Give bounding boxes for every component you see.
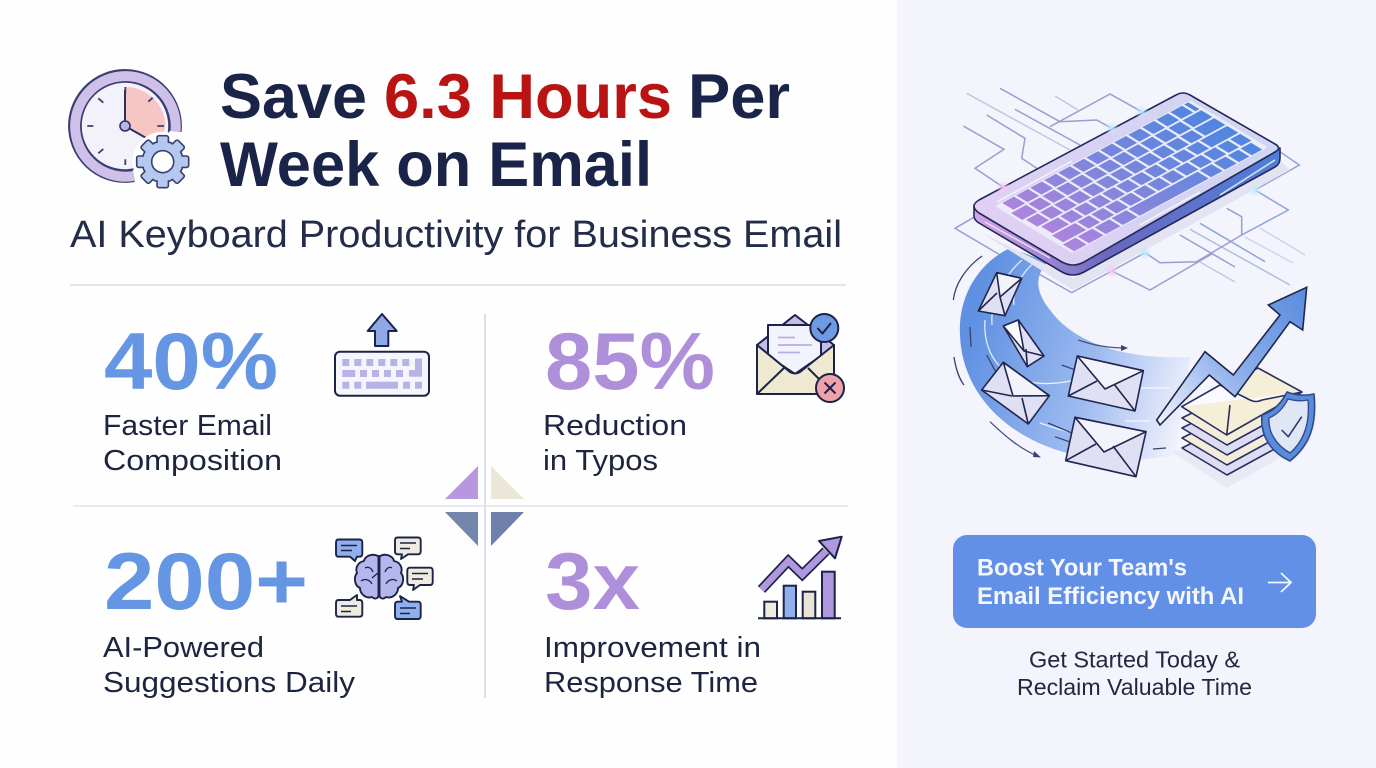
title: Save <box>220 62 367 132</box>
panel: right sidebar background <box>897 0 1376 768</box>
panel: stat 40% faster composition <box>103 314 429 477</box>
title <box>220 62 790 200</box>
panel: stat 200+ suggestions <box>103 537 433 699</box>
envelope 3 <box>982 362 1049 424</box>
envelope 1 <box>978 273 1022 316</box>
button text: Email Efficiency with AI <box>977 583 1244 610</box>
stat label <box>544 632 761 699</box>
panel: stat 3x response time <box>544 537 842 699</box>
illustration: AI keyboard sending emails <box>953 88 1315 488</box>
stat value 40%: 40% <box>104 317 278 407</box>
swoosh ribbon <box>953 248 1190 460</box>
circuit lines behind keyboard <box>955 88 1305 293</box>
stat label: Reduction <box>543 410 687 442</box>
button text <box>977 555 1244 610</box>
stat label <box>103 410 282 477</box>
envelope 2 <box>1003 320 1044 367</box>
growth arrow <box>1157 287 1307 425</box>
circuit nodes <box>996 105 1262 278</box>
stat value 3x: 3x <box>545 537 640 627</box>
subtitle: AI Keyboard Productivity for Business Email <box>70 214 842 256</box>
stat label: Faster Email <box>103 410 272 442</box>
stat label <box>103 632 356 699</box>
envelope 5 <box>1066 417 1146 477</box>
shield with check <box>1262 392 1315 461</box>
keyboard <box>974 93 1290 290</box>
call-to-action caption: Get Started Today & <box>1029 647 1240 673</box>
icon: growth bar chart with arrow <box>758 537 842 618</box>
title: 6.3 Hours <box>384 62 672 132</box>
stat label: Suggestions Daily <box>103 667 356 699</box>
icon: keyboard with up arrow <box>335 314 429 396</box>
button text: Boost Your Team's <box>977 555 1187 582</box>
central diamond of four triangles <box>445 466 524 546</box>
flying envelopes <box>978 273 1146 477</box>
title: Per <box>688 62 790 132</box>
title: Week on Email <box>220 130 652 200</box>
stat value 200+: 200+ <box>104 537 308 627</box>
icon: brain with chat bubbles <box>336 538 433 619</box>
icon: envelope with check and cross <box>757 314 844 402</box>
call-to-action caption: Reclaim Valuable Time <box>1017 674 1252 700</box>
stat label: Response Time <box>544 667 758 699</box>
panel: stat 85% reduction in typos <box>543 314 844 477</box>
stat label: Composition <box>103 445 282 477</box>
icon: clock with gear <box>75 76 193 192</box>
icon: right arrow <box>1268 573 1291 592</box>
stat label: AI-Powered <box>103 632 264 664</box>
stat label: Improvement in <box>544 632 761 664</box>
call-to-action button <box>953 535 1316 628</box>
envelope 4 <box>1068 356 1143 411</box>
stat value 85%: 85% <box>545 317 715 407</box>
stat label: in Typos <box>543 445 658 477</box>
call-to-action caption <box>1017 647 1252 700</box>
envelope stack <box>1172 368 1312 488</box>
stat label <box>543 410 687 477</box>
